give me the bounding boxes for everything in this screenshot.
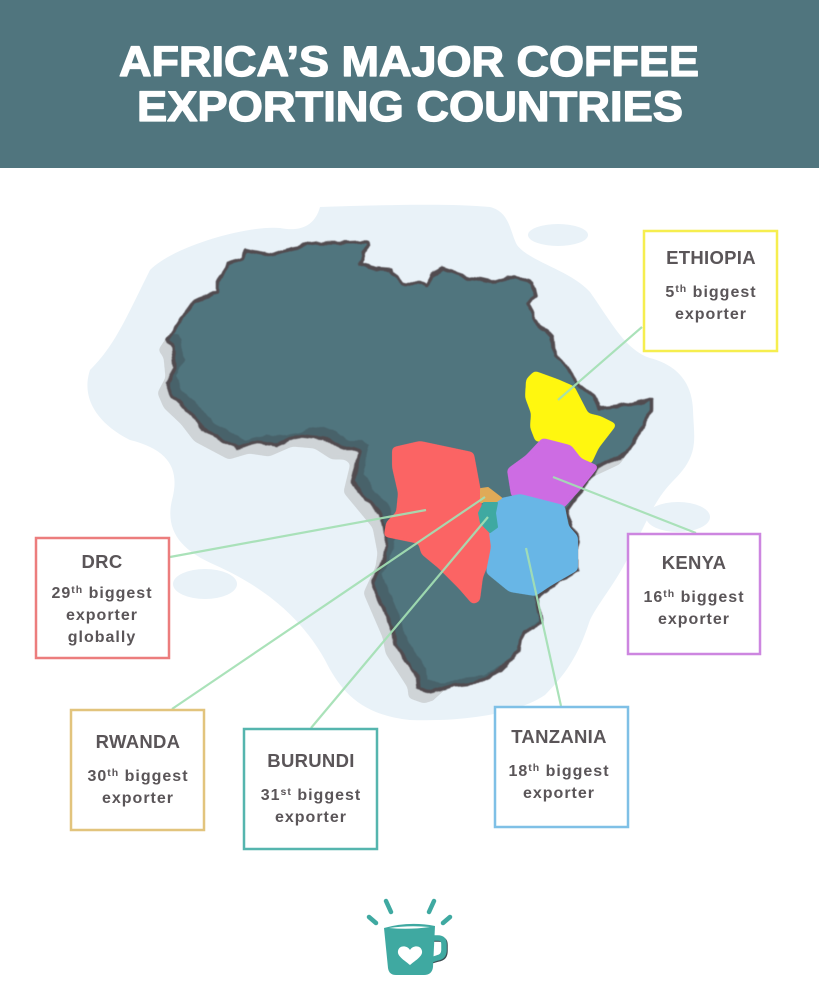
mug rays bbox=[369, 901, 450, 923]
callout: DRC: biggest bbox=[83, 585, 153, 602]
country: Tanzania bbox=[488, 496, 576, 594]
callout: Tanzania: exporter bbox=[523, 785, 595, 802]
country: Burundi bbox=[479, 503, 497, 532]
callout: Tanzania: th bbox=[528, 762, 540, 774]
map of Africa bbox=[150, 230, 670, 702]
callout: Tanzania: biggest bbox=[540, 763, 610, 780]
callout: Ethiopia: exporter bbox=[675, 306, 747, 323]
country: Kenya bbox=[509, 440, 596, 506]
callout: Kenya: th bbox=[663, 588, 675, 600]
background blob behind map bbox=[87, 205, 710, 720]
callout: Rwanda bbox=[71, 710, 204, 830]
country: Ethiopia bbox=[527, 373, 614, 462]
callout: Ethiopia: th bbox=[675, 283, 687, 295]
callout: Kenya: exporter bbox=[658, 611, 730, 628]
callout: Burundi: 31 bbox=[261, 787, 281, 804]
callout: Kenya: 16 bbox=[643, 589, 663, 606]
continent fill bbox=[168, 242, 650, 690]
title bbox=[119, 38, 699, 131]
callout: Tanzania: 18 bbox=[508, 763, 528, 780]
callout: DRC: th bbox=[71, 584, 83, 596]
callout: Rwanda: 30 bbox=[87, 768, 107, 785]
callout: Kenya: KENYA bbox=[662, 552, 726, 573]
title: EXPORTING COUNTRIES bbox=[137, 83, 683, 131]
callout: Tanzania: TANZANIA bbox=[511, 726, 607, 747]
mug heart bbox=[398, 946, 422, 965]
callout: Burundi: st bbox=[281, 786, 292, 798]
callout: DRC: exporter bbox=[66, 607, 138, 624]
callout: Burundi bbox=[244, 729, 377, 849]
callout: Burundi: BURUNDI bbox=[267, 750, 355, 771]
callout: Kenya bbox=[628, 534, 760, 654]
continent outline bbox=[167, 242, 652, 692]
header banner bbox=[0, 0, 819, 168]
callout: Rwanda: th bbox=[107, 767, 119, 779]
callout: Ethiopia: ETHIOPIA bbox=[666, 247, 756, 268]
callout: DRC: globally bbox=[68, 629, 136, 646]
callout: Burundi: biggest bbox=[292, 787, 361, 804]
country: Rwanda bbox=[481, 488, 501, 502]
leader lines bbox=[170, 327, 696, 728]
mug body bbox=[384, 924, 435, 975]
callout: Rwanda: RWANDA bbox=[96, 731, 180, 752]
callout: Kenya: biggest bbox=[675, 589, 745, 606]
callout: Tanzania bbox=[495, 707, 628, 827]
mug handle bbox=[431, 939, 445, 961]
callout: Ethiopia: 5 bbox=[665, 284, 675, 301]
map shadow bbox=[158, 335, 626, 703]
continent bbox=[150, 230, 670, 700]
callout: Burundi: exporter bbox=[275, 809, 347, 826]
callout: Rwanda: exporter bbox=[102, 790, 174, 807]
icon: coffee mug with heart bbox=[369, 901, 450, 975]
callout: DRC bbox=[36, 538, 169, 658]
callout: DRC: 29 bbox=[51, 585, 71, 602]
country: DRC bbox=[386, 443, 492, 602]
callout: DRC: DRC bbox=[82, 551, 122, 572]
title: AFRICA’S MAJOR COFFEE bbox=[119, 38, 699, 86]
callout: Ethiopia bbox=[644, 231, 777, 351]
callout: Rwanda: biggest bbox=[119, 768, 189, 785]
callout: Ethiopia: biggest bbox=[687, 284, 757, 301]
